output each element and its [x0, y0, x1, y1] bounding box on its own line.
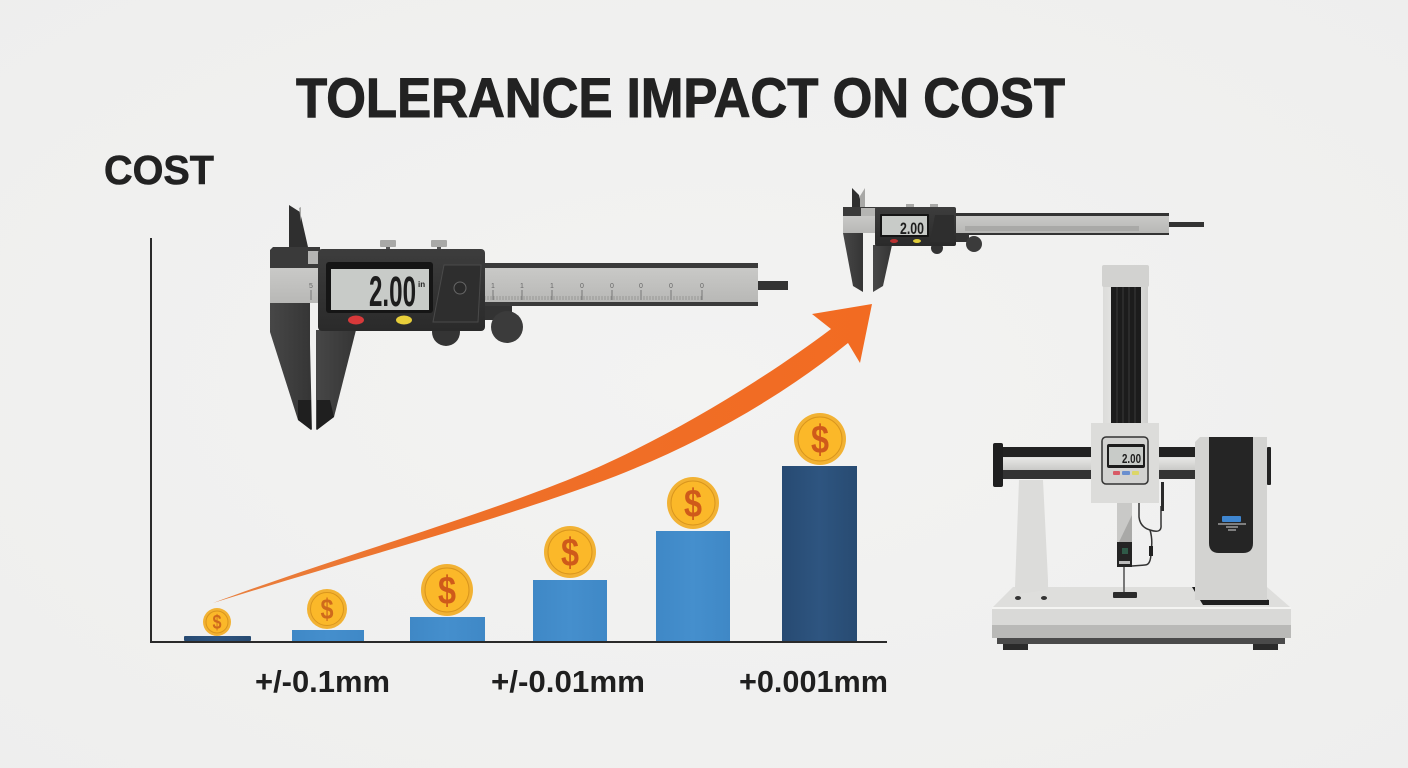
LCD screen [326, 262, 433, 313]
machine feet [1003, 644, 1278, 650]
lower left jaw [270, 303, 312, 430]
carriage [1091, 423, 1159, 503]
measuring pad [1113, 592, 1137, 598]
LCD reading: 2.00 [369, 268, 416, 316]
coin 5 [667, 477, 719, 529]
cabinet foot [1192, 587, 1269, 605]
beam [955, 213, 1169, 235]
jaw tips [298, 400, 334, 430]
ruler numbers [309, 283, 704, 290]
coin 1: $ [212, 612, 222, 634]
ruler numbers: 0 [669, 283, 673, 290]
carriage display bezel [1102, 437, 1148, 484]
rising cost arrow [213, 304, 872, 603]
ruler ticks [485, 296, 701, 300]
thumb wheels [484, 306, 512, 320]
rod [758, 281, 788, 290]
cabinet black panel [1209, 437, 1253, 553]
cabinet [1195, 437, 1267, 600]
base shadow strip [997, 638, 1285, 644]
ruler numbers: 5 [309, 283, 313, 290]
coin 2 [307, 589, 347, 629]
bar 1 [184, 636, 251, 641]
coin 6 [794, 413, 846, 465]
coin 3 [421, 564, 473, 616]
coin 2: $ [320, 594, 334, 626]
coin 4 [544, 526, 596, 578]
bar chart [151, 238, 887, 642]
bar 6 [782, 466, 857, 641]
ruler numbers: 1 [491, 283, 495, 290]
side panel [433, 265, 481, 322]
coin 5: $ [684, 482, 702, 526]
x axis labels [255, 664, 888, 699]
coin 3: $ [438, 569, 456, 613]
ruler numbers: 0 [610, 283, 614, 290]
ruler numbers: 1 [520, 283, 524, 290]
fixed head [843, 207, 877, 217]
coin 4: $ [561, 531, 579, 575]
base front [992, 607, 1291, 638]
small caliper [843, 188, 1204, 292]
side panel [930, 215, 954, 242]
ruler numbers: 1 [550, 283, 554, 290]
coin 1 [203, 608, 231, 636]
probe cable [1132, 500, 1161, 566]
red button [348, 316, 364, 324]
display body [318, 249, 485, 331]
base top [993, 587, 1290, 607]
bar 3 [410, 617, 485, 641]
column black insert [1111, 287, 1141, 423]
rail end cap [993, 443, 1003, 487]
large caliper [270, 205, 788, 430]
lower right jaw [316, 330, 356, 430]
carriage reading: 2.00 [1122, 451, 1141, 466]
display body [875, 207, 956, 246]
probe head [1117, 542, 1132, 567]
beam [484, 263, 758, 306]
label 0.001mm: +0.001mm [739, 664, 888, 699]
cabinet handle [1267, 447, 1271, 485]
title: TOLERANCE IMPACT ON COST [296, 66, 1065, 129]
yellow button [396, 316, 412, 324]
bar 2 [292, 630, 364, 641]
top buttons [380, 240, 447, 250]
probe needle [1123, 567, 1125, 592]
bolts [1015, 596, 1047, 600]
upper jaw [852, 188, 862, 207]
lower right jaw [873, 245, 892, 292]
label 0.01mm: +/-0.01mm [491, 664, 645, 699]
probe arm [1117, 503, 1132, 542]
y axis label: COST [104, 147, 214, 193]
cabinet label [1222, 516, 1241, 522]
left leg [1015, 480, 1048, 594]
ruler numbers: 0 [700, 283, 704, 290]
carriage LCD [1107, 444, 1145, 468]
unit: in [418, 280, 425, 289]
column [1103, 285, 1148, 425]
horizontal rail [1003, 447, 1196, 479]
ruler numbers: 0 [639, 283, 643, 290]
top buttons [906, 204, 914, 208]
thumb wheels [955, 235, 969, 242]
column cap [1102, 265, 1149, 287]
red button [890, 239, 898, 243]
fixed head [270, 247, 320, 268]
lower left jaw [843, 233, 863, 292]
label 0.1mm: +/-0.1mm [255, 664, 390, 699]
upper jaw [289, 205, 308, 247]
chart axes [151, 238, 887, 642]
rod [1169, 222, 1204, 227]
carriage buttons [1113, 471, 1139, 475]
bar 5 [656, 531, 730, 641]
LCD reading: 2.00 [900, 219, 924, 238]
yellow button [913, 239, 921, 243]
measuring machine [992, 265, 1291, 650]
coin 6: $ [811, 418, 829, 462]
bar 4 [533, 580, 607, 641]
ruler numbers: 0 [580, 283, 584, 290]
LCD screen [880, 214, 929, 237]
